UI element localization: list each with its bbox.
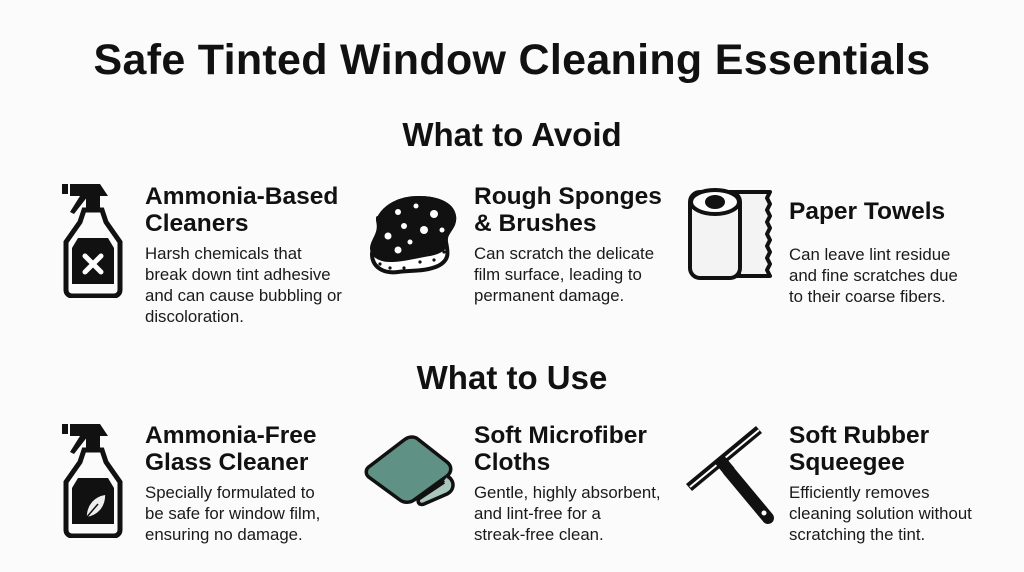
item: ammonia-based: Ammonia-Based bbox=[145, 183, 338, 210]
item: rough sponges: Rough Sponges bbox=[474, 183, 662, 210]
item: rough sponges bbox=[474, 183, 662, 305]
item: squeegee: Efficiently removes bbox=[789, 483, 930, 502]
title: Safe Tinted Window Cleaning Essentials bbox=[94, 36, 930, 84]
item: ammonia-free bbox=[145, 422, 320, 544]
item: rough sponges: & Brushes bbox=[474, 210, 597, 237]
item: ammonia-based bbox=[145, 183, 342, 326]
item: squeegee bbox=[789, 422, 972, 544]
icon: ammonia bottle bbox=[62, 184, 122, 298]
icon: sponge bbox=[370, 196, 456, 274]
item: rough sponges: film surface, leading to bbox=[474, 265, 642, 284]
item: ammonia-based: and can cause bubbling or bbox=[145, 286, 342, 305]
item: microfiber: Cloths bbox=[474, 449, 550, 476]
heading: what to avoid: What to Avoid bbox=[402, 116, 622, 153]
item: squeegee: Squeegee bbox=[789, 449, 905, 476]
item: squeegee: Soft Rubber bbox=[789, 422, 929, 449]
item: ammonia-based: Cleaners bbox=[145, 210, 249, 237]
item: ammonia-based: break down tint adhesive bbox=[145, 265, 331, 284]
item: microfiber: Soft Microfiber bbox=[474, 422, 647, 449]
item: ammonia-free: Ammonia-Free bbox=[145, 422, 317, 449]
item: microfiber: Gentle, highly absorbent, bbox=[474, 483, 661, 502]
item: rough sponges: permanent damage. bbox=[474, 286, 624, 305]
icon: ammonia-free bottle bbox=[62, 424, 122, 538]
item: paper towels bbox=[789, 198, 958, 306]
item: paper towels: Paper Towels bbox=[789, 198, 945, 225]
item: microfiber bbox=[474, 422, 661, 544]
item: ammonia-free: be safe for window film, bbox=[145, 504, 320, 523]
icon: squeegee bbox=[686, 426, 774, 524]
item: squeegee: scratching the tint. bbox=[789, 525, 925, 544]
heading: what to use: What to Use bbox=[417, 359, 607, 396]
item: paper towels: Can leave lint residue bbox=[789, 245, 950, 264]
item: ammonia-free: ensuring no damage. bbox=[145, 525, 303, 544]
item: microfiber: streak-free clean. bbox=[474, 525, 604, 544]
item: paper towels: and fine scratches due bbox=[789, 266, 958, 285]
item: rough sponges: Can scratch the delicate bbox=[474, 244, 654, 263]
icon: microfiber cloth bbox=[364, 435, 455, 506]
item: paper towels: to their coarse fibers. bbox=[789, 287, 946, 306]
item: microfiber: and lint-free for a bbox=[474, 504, 601, 523]
item: ammonia-free: Specially formulated to bbox=[145, 483, 315, 502]
item: ammonia-free: Glass Cleaner bbox=[145, 449, 308, 476]
icon: paper towel bbox=[688, 188, 772, 280]
item: ammonia-based: discoloration. bbox=[145, 307, 244, 326]
item: ammonia-based: Harsh chemicals that bbox=[145, 244, 302, 263]
item: squeegee: cleaning solution without bbox=[789, 504, 972, 523]
